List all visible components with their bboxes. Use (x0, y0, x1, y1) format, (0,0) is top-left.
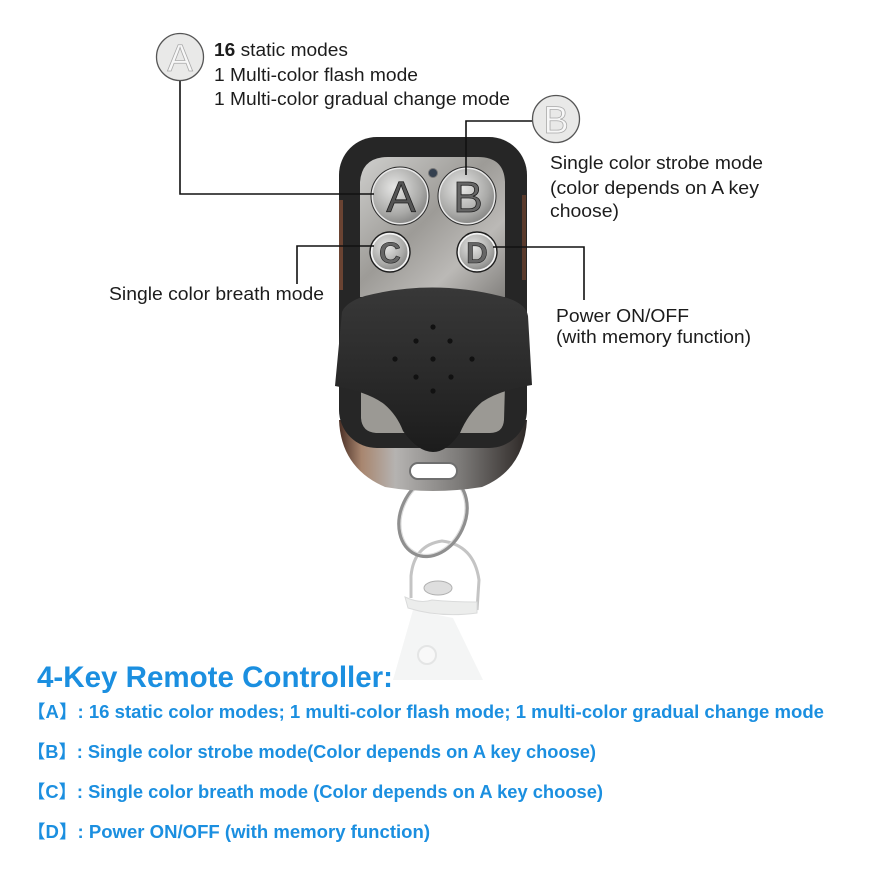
clip swivel (405, 597, 477, 615)
button C: C (379, 237, 401, 270)
sleeve dots (392, 324, 475, 394)
button D (457, 232, 497, 272)
key loop slot (410, 463, 457, 479)
button A: A (386, 173, 416, 222)
side highlight left (339, 200, 343, 290)
text: key B description: Single color strobe mode (550, 153, 763, 173)
badge A (156, 34, 204, 80)
lower metal windows (361, 385, 505, 433)
text: key A description: 1 Multi-color flash mode (214, 65, 418, 85)
LED (428, 168, 438, 178)
leader line B (466, 121, 533, 175)
text: key B description (550, 153, 763, 221)
text: key A description: 16 static modes (214, 40, 348, 60)
button A (371, 167, 429, 225)
text: key A description (214, 40, 510, 109)
button C (370, 232, 410, 272)
feature B: 【B】: Single color strobe mode(Color depends on A key choose) (27, 742, 596, 762)
heading: 4-Key Remote Controller: (37, 661, 393, 694)
chrome lower shell (339, 420, 527, 491)
faded clip eyelet (418, 646, 436, 664)
text: key B description: choose) (550, 201, 619, 221)
faded clip body (393, 610, 483, 680)
rubber sleeve (335, 288, 532, 452)
brushed metal plate (360, 157, 505, 297)
badge A: A (167, 38, 193, 80)
black frame (339, 137, 527, 448)
leader line A (180, 80, 374, 194)
text: key D description: (with memory function) (556, 327, 751, 347)
text: key A description: 1 Multi-color gradual change mode (214, 89, 510, 109)
feature A: 【A】: 16 static color modes; 1 multi-color flash mode; 1 multi-color gradual change mode (27, 702, 824, 722)
badge B: B (543, 100, 569, 142)
keyring and faded lanyard clip (386, 464, 483, 680)
clip loop (411, 541, 479, 610)
text: key B description: (color depends on A key (550, 178, 759, 198)
text: key D description: Power ON/OFF (556, 306, 689, 326)
feature D: 【D】: Power ON/OFF (with memory function) (27, 822, 430, 842)
text: key C description: Single color breath mode (109, 284, 324, 304)
leader line C (297, 246, 374, 284)
feature list (27, 702, 824, 842)
button B: B (453, 173, 483, 222)
button D: D (466, 237, 488, 270)
button B (438, 167, 496, 225)
split ring (386, 464, 480, 568)
text: key D description (556, 306, 751, 347)
remote control (335, 137, 532, 491)
badge B (532, 96, 580, 142)
clip rivet (424, 581, 452, 595)
leader line D (493, 247, 584, 300)
feature C: 【C】: Single color breath mode (Color depends on A key choose) (27, 782, 603, 802)
side highlight right (522, 195, 526, 280)
